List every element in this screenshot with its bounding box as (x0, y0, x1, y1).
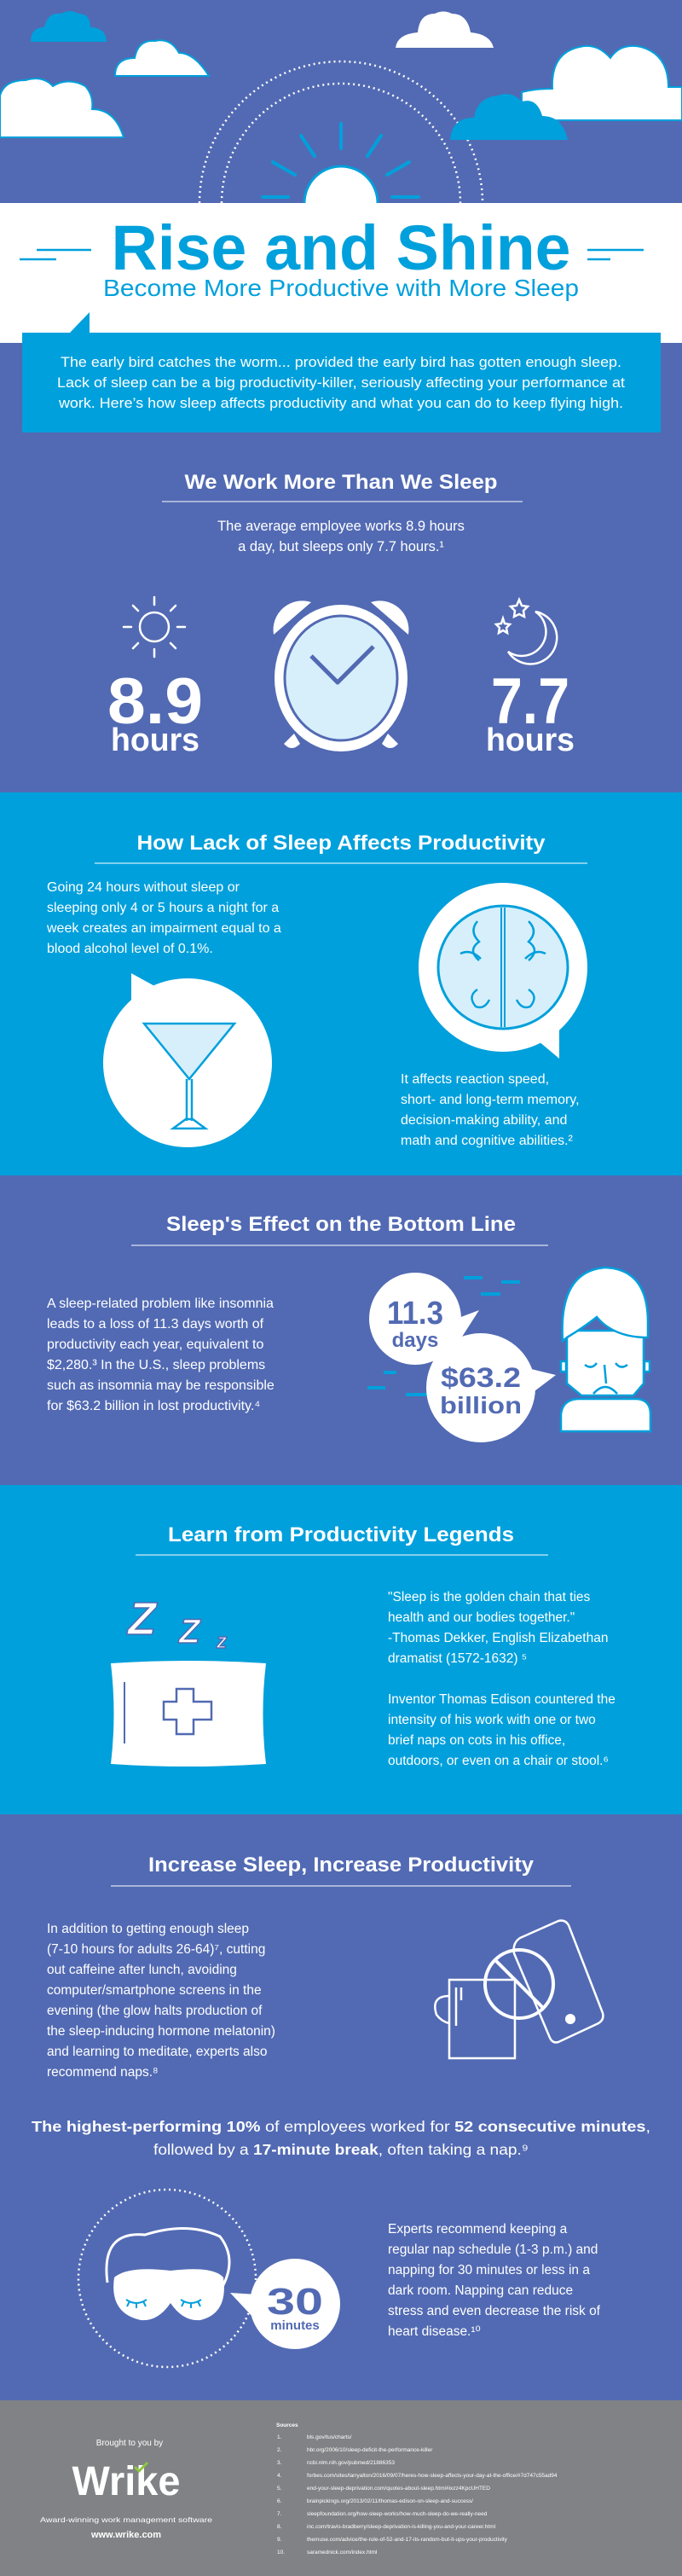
callout: 11.3 days (369, 1273, 479, 1365)
sources list: brainpickings.org/2013/02/11/thomas-edison-on-sleep-and-success/ (307, 2498, 473, 2504)
heading: Sleep's Effect on the Bottom Line (166, 1213, 516, 1236)
text: insomnia cost: such as insomnia may be responsible (47, 1378, 275, 1393)
icon: alarm clock (274, 600, 408, 751)
background: header sky (0, 0, 682, 792)
callout: 30 minutes (230, 2259, 340, 2349)
icon: moon and stars (496, 600, 557, 664)
footer (0, 2400, 682, 2576)
text: nap schedule: stress and even decrease the risk of (388, 2304, 601, 2318)
text: nap schedule: dark room. Napping can reduce (388, 2283, 573, 2298)
brand block (40, 2439, 212, 2540)
sources list: 5. (277, 2486, 282, 2492)
heading: Learn from Productivity Legends (168, 1523, 514, 1546)
text: Edison naps: intensity of his work with one or two (388, 1713, 596, 1727)
callout: $63.2 billion: $63.2 (441, 1362, 521, 1393)
stat: 8.9 hours: hours (111, 722, 199, 758)
icon: pillow with zzz: z (216, 1630, 227, 1653)
text: Edison naps (388, 1692, 616, 1768)
panel: how lack of sleep affects productivity (0, 792, 682, 1175)
sources list: Sources (276, 2422, 298, 2428)
callout: $63.2 billion: billion (440, 1392, 522, 1419)
sources list: 2. (277, 2447, 282, 2453)
text: nap schedule (388, 2222, 601, 2339)
heading: How Lack of Sleep Affects Productivity (136, 832, 546, 855)
text: insomnia cost: $2,280.³ In the U.S., sleep problems (47, 1358, 265, 1372)
sources list (276, 2422, 558, 2556)
intro callout box: Lack of sleep can be a big productivity-killer, seriously affecting your performance at (57, 375, 625, 391)
sources list: inc.com/travis-bradberry/sleep-deprivation-is-killing-you-and-your-career.html (307, 2524, 496, 2530)
title: Rise and Shine (111, 212, 571, 283)
speed lines (367, 1278, 520, 1395)
text: sleep habits (47, 1922, 275, 2080)
text: work vs sleep stat: a day, but sleeps only 7.7 hours.¹ (238, 539, 444, 554)
callout: 11.3 days: days (392, 1329, 438, 1352)
sources list: forbes.com/sites/larryalton/2016/09/07/heres-how-sleep-affects-your-day-at-the-office/#7d747c55ad94 (307, 2473, 558, 2479)
text: Edison naps: Inventor Thomas Edison countered the (388, 1692, 616, 1707)
icon: no mug and phone (435, 1921, 603, 2058)
intro callout box (22, 312, 661, 432)
sources list: 3. (277, 2460, 282, 2466)
icon: tired man (561, 1268, 650, 1431)
panel: increase sleep, increase productivity (0, 1814, 682, 2400)
text: nap schedule: napping for 30 minutes or less in a (388, 2263, 590, 2277)
text: sleep habits: computer/smartphone screens in the (47, 1983, 262, 1998)
sources list: sleepfoundation.org/how-sleep-works/how-much-sleep-do-we-really-need (307, 2511, 488, 2517)
stat: 7.7 hours (486, 665, 575, 758)
text: insomnia cost: A sleep-related problem like insomnia (47, 1297, 274, 1311)
sources list: 9. (277, 2537, 282, 2543)
icon: pillow with zzz (111, 1593, 266, 1767)
text: nap schedule: Experts recommend keeping a (388, 2222, 568, 2237)
sources list: ncbi.nlm.nih.gov/pubmed/21886353 (307, 2460, 395, 2466)
text: cognitive effects: short- and long-term memory, (401, 1093, 580, 1107)
text: alcohol comparison: week creates an impairment equal to a (46, 921, 281, 936)
icon: pillow with zzz: Z (178, 1613, 201, 1651)
text: sleep habits: and learning to meditate, experts also (47, 2045, 268, 2059)
text: Dekker quote: health and our bodies together." (388, 1610, 575, 1625)
text: alcohol comparison: sleeping only 4 or 5 hours a night for a (47, 901, 279, 915)
text: nap schedule: regular nap schedule (1-3 p.m.) and (388, 2242, 598, 2257)
text: Dekker quote: -Thomas Dekker, English Elizabethan (388, 1631, 608, 1645)
icon: pillow with zzz: Z (126, 1593, 158, 1645)
text: cognitive effects: decision-making ability, and (401, 1113, 567, 1128)
text: 52/17 rule: followed by a 17-minute break , often taking a nap.⁹ (153, 2141, 529, 2158)
title band (0, 203, 682, 343)
subtitle: Become More Productive with More Sleep (103, 275, 579, 301)
sources list: 6. (277, 2498, 282, 2504)
icon: brain in speech bubble (419, 883, 587, 1059)
intro callout box: The early bird catches the worm... provided the early bird has gotten enough sleep. (61, 355, 621, 370)
brand block: Award-winning work management software (40, 2515, 212, 2524)
sources list: 10. (277, 2550, 285, 2556)
text: sleep habits: (7-10 hours for adults 26-64)⁷, cutting (47, 1942, 265, 1957)
text: insomnia cost (47, 1297, 275, 1413)
text: alcohol comparison (46, 880, 281, 956)
sources list: saramednick.com/index.html (307, 2550, 378, 2556)
icon: sun (124, 597, 185, 657)
stat: 7.7 hours: 7.7 (491, 665, 569, 738)
brand block: www.wrike.com (90, 2530, 161, 2540)
text: insomnia cost: leads to a loss of 11.3 days worth of (47, 1317, 264, 1332)
sources list: 8. (277, 2524, 282, 2530)
sources list: 4. (277, 2473, 282, 2479)
panel: learn from productivity legends (0, 1485, 682, 1814)
sources list: themuse.com/advice/the-rule-of-52-and-17-its-random-but-it-ups-your-productivity (307, 2537, 508, 2543)
text: 52/17 rule: The highest-performing 10% of employees worked for 52 consecutive minutes , (32, 2118, 650, 2135)
text: sleep habits: evening (the glow halts production of (47, 2004, 263, 2018)
text: sleep habits: In addition to getting enough sleep (47, 1922, 249, 1936)
stat: 7.7 hours: hours (486, 722, 575, 758)
brand block: Wrike (72, 2459, 181, 2504)
callout: 30 minutes: 30 (267, 2281, 323, 2323)
icon: martini in speech bubble (103, 973, 272, 1147)
text: insomnia cost: productivity each year, equivalent to (47, 1337, 263, 1352)
clouds (0, 11, 682, 140)
text: Edison naps: brief naps on cots in his office, (388, 1733, 565, 1748)
text: cognitive effects (401, 1072, 580, 1148)
text: cognitive effects: It affects reaction speed, (401, 1072, 549, 1087)
stat: 8.9 hours: 8.9 (107, 665, 203, 738)
callout: 30 minutes: minutes (270, 2318, 320, 2333)
heading: Increase Sleep, Increase Productivity (148, 1854, 535, 1877)
text: Dekker quote (388, 1590, 608, 1666)
sources list: end-your-sleep-deprivation.com/quotes-about-sleep.html#ixzz4KpcUHTED (307, 2486, 490, 2492)
text: Edison naps: outdoors, or even on a chair or stool.⁶ (388, 1754, 609, 1768)
panel: sleep's effect on the bottom line (0, 1175, 682, 1485)
text: Dekker quote: dramatist (1572-1632) ⁵ (388, 1651, 527, 1666)
text: 52/17 rule (32, 2118, 650, 2158)
text: sleep habits: recommend naps.⁸ (47, 2065, 159, 2080)
text: work vs sleep stat: The average employee works 8.9 hours (217, 519, 465, 534)
text: alcohol comparison: Going 24 hours without sleep or (47, 880, 240, 895)
sources list: hbr.org/2006/10/sleep-deficit-the-performance-killer (307, 2447, 433, 2453)
text: alcohol comparison: blood alcohol level of 0.1%. (47, 942, 213, 956)
intro callout box: work. Here’s how sleep affects productivity and what you can do to keep flying high. (58, 396, 623, 411)
sources list: 7. (277, 2511, 282, 2517)
sources list: 1. (277, 2434, 282, 2440)
sun rising with dotted arcs (199, 61, 483, 240)
text: work vs sleep stat (217, 519, 465, 554)
callout: $63.2 billion (426, 1333, 556, 1442)
sources list: bls.gov/tus/charts/ (307, 2434, 352, 2440)
heading: We Work More Than We Sleep: We Work More Than We Sleep (184, 471, 498, 494)
text: sleep habits: the sleep-inducing hormone melatonin) (47, 2024, 275, 2039)
text: nap schedule: heart disease.¹⁰ (388, 2324, 481, 2339)
text: insomnia cost: for $63.2 billion in lost productivity.⁴ (47, 1399, 260, 1413)
callout: 11.3 days: 11.3 (387, 1296, 443, 1332)
text: sleep habits: out caffeine after lunch, avoiding (47, 1963, 237, 1977)
text: cognitive effects: math and cognitive abilities.² (401, 1134, 574, 1148)
brand block: Brought to you by (96, 2439, 163, 2448)
icon: sleep mask in dotted circle (78, 2190, 256, 2367)
text: Dekker quote: "Sleep is the golden chain that ties (388, 1590, 591, 1604)
